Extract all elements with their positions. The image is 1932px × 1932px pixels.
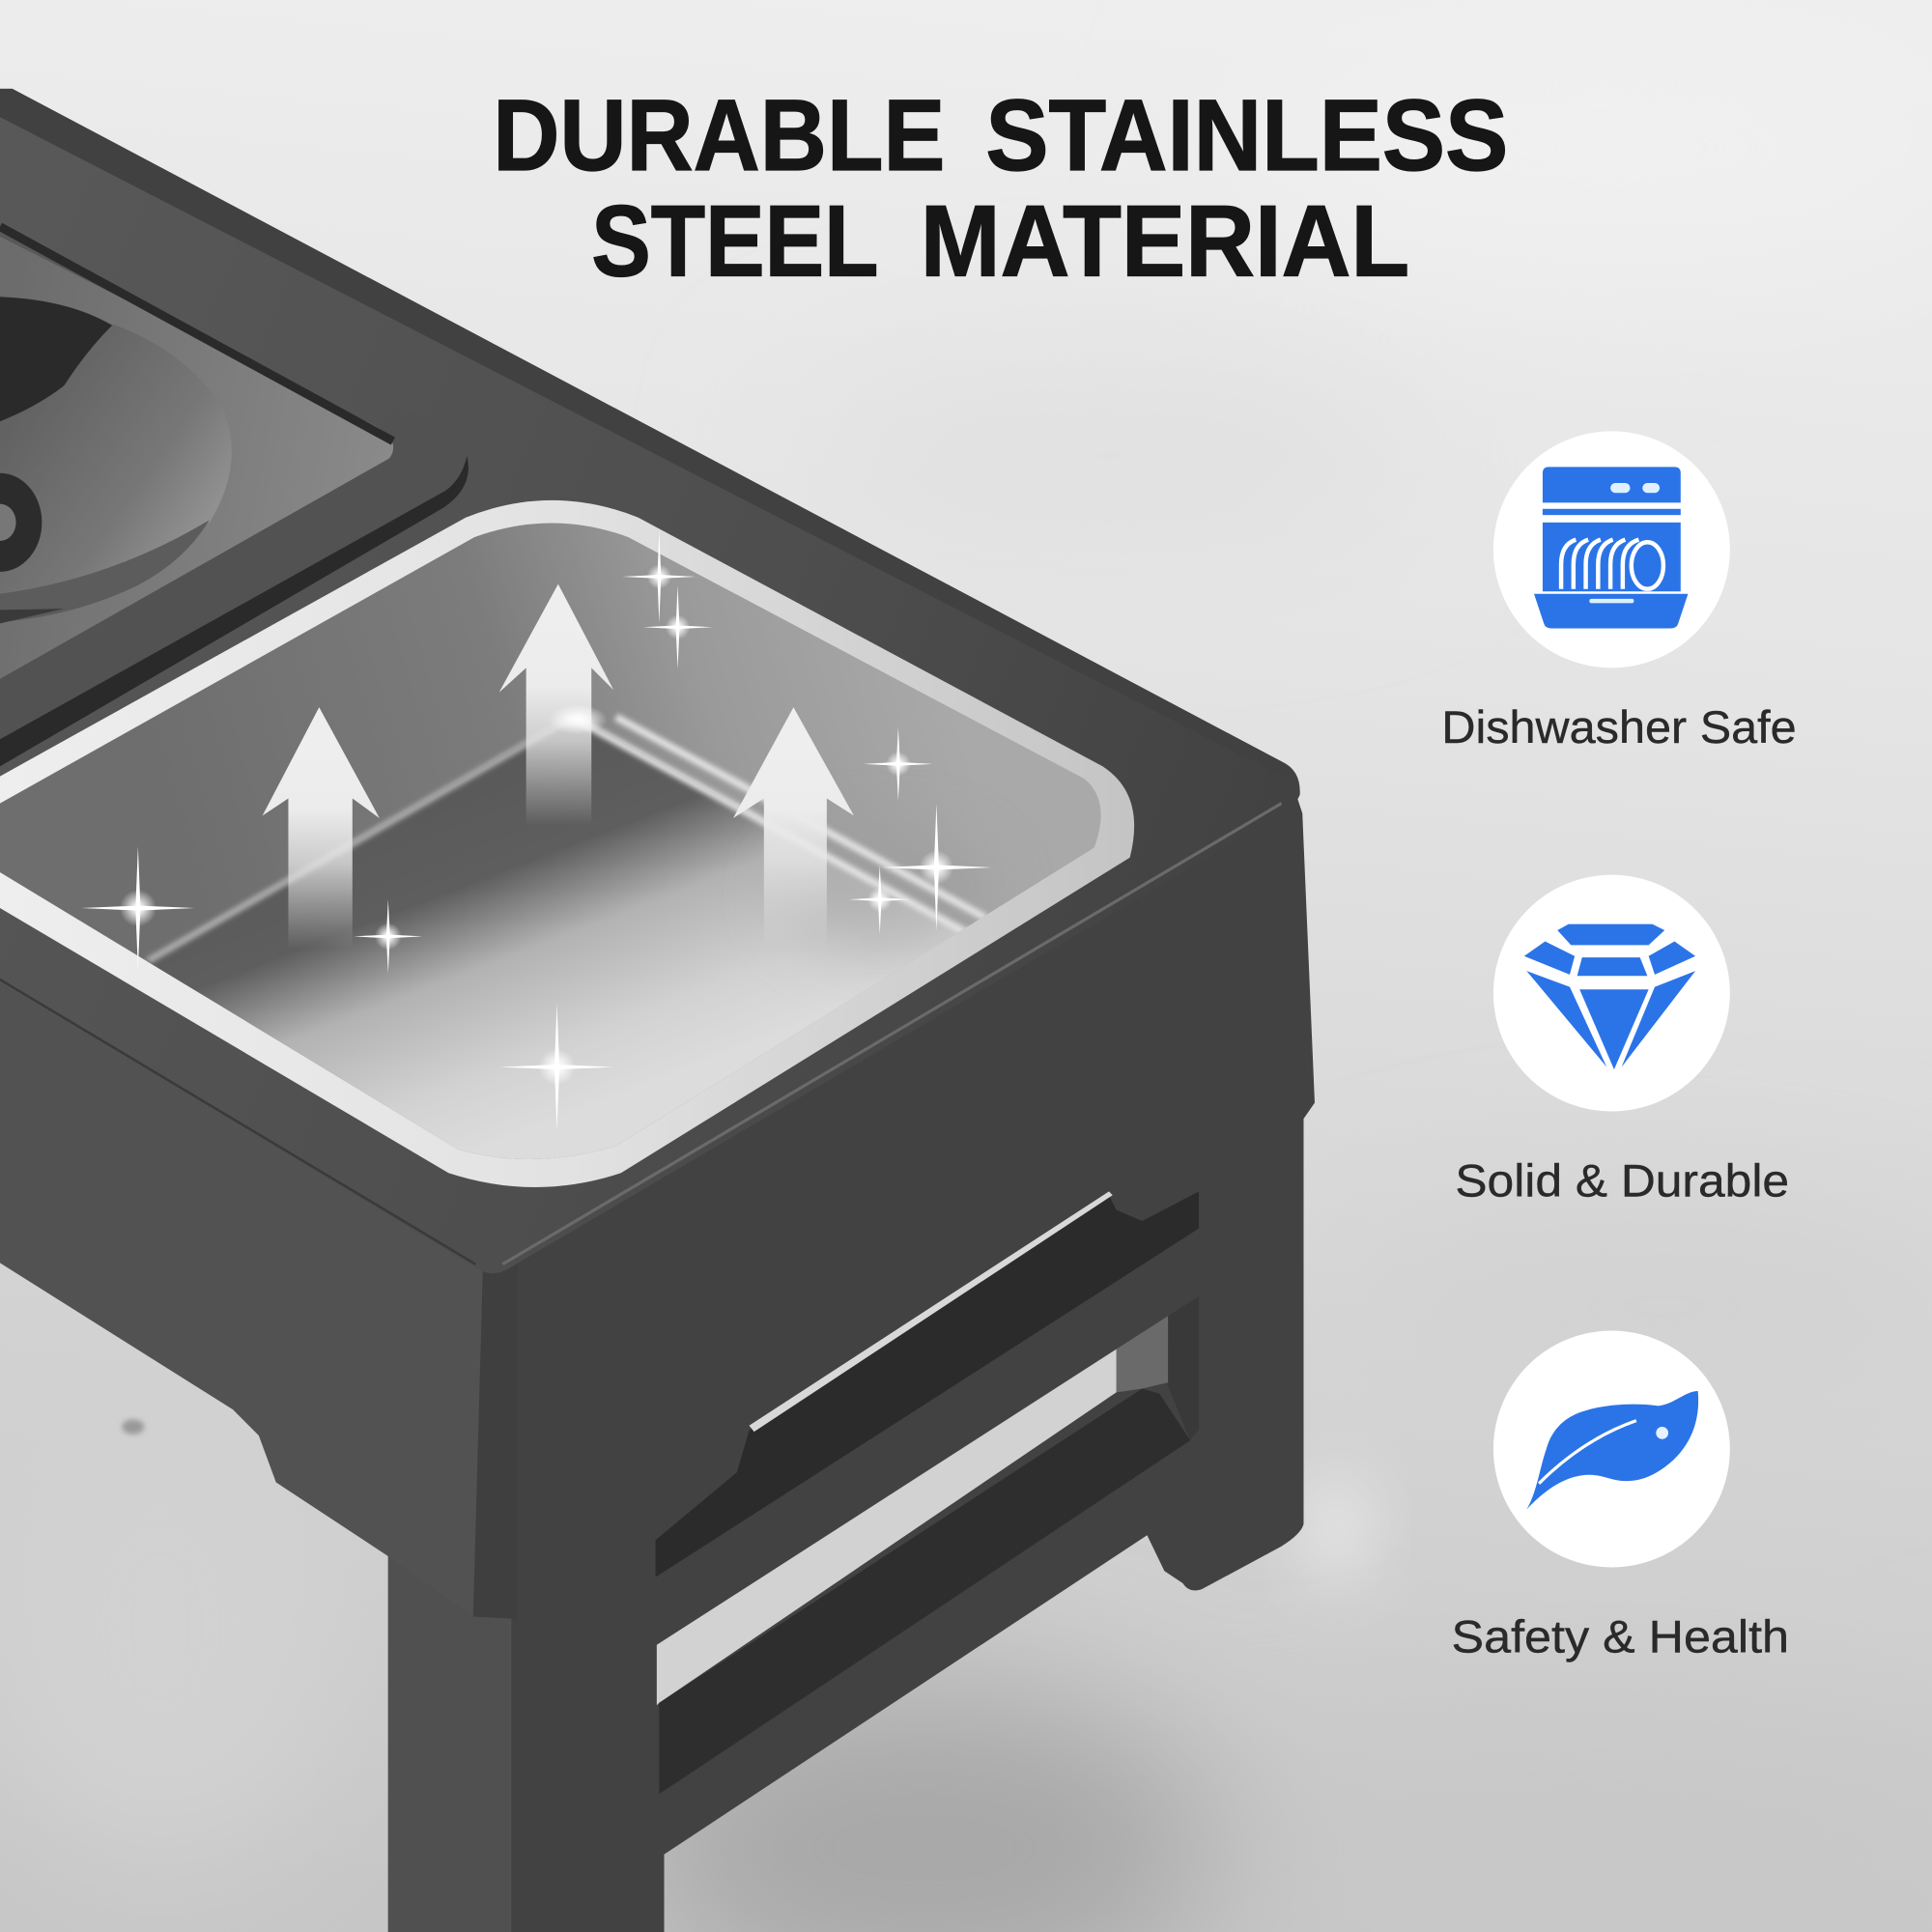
upper slot light sliver [750, 1191, 1113, 1432]
stand top surface [0, 89, 1300, 1273]
icon: diamond [1524, 924, 1695, 1069]
feature: solid and durable [1455, 875, 1789, 1208]
tray rim face [0, 407, 467, 739]
icon: arrow centre [499, 584, 613, 826]
front leg lighter side [388, 1556, 509, 1932]
feature: dishwasher safe [1441, 431, 1797, 753]
stand left face [0, 980, 518, 1932]
upper rung recess [656, 1191, 1199, 1577]
back leg inner dark column [1168, 1296, 1199, 1440]
stainless steel bowl [0, 493, 1134, 1187]
sparkles [81, 529, 992, 1131]
title [493, 79, 1508, 298]
floor gap between rungs [657, 1350, 1117, 1705]
label: Dishwasher Safe [1441, 702, 1797, 753]
icon: arrow left [263, 707, 380, 949]
top plate edge lines [0, 980, 475, 1264]
icon: leaf [1526, 1391, 1698, 1509]
title: DURABLE [493, 79, 945, 192]
label: Solid & Durable [1455, 1156, 1789, 1208]
product: elevated pet feeder stand [0, 89, 1315, 1932]
title: STEEL [591, 185, 878, 298]
back edge strip [0, 89, 1292, 781]
back leg inner grey face [1117, 1316, 1168, 1392]
tray lower shadow band [0, 456, 469, 766]
icon: arrow right [733, 707, 854, 949]
centre arrow glow [549, 705, 608, 734]
left tray with black bowl [0, 227, 469, 766]
tray groove [0, 227, 393, 441]
icon: dishwasher [1534, 467, 1688, 629]
title: STAINLESS [985, 79, 1508, 192]
label: Safety & Health [1452, 1611, 1789, 1662]
feature: safety and health [1452, 1331, 1789, 1662]
title: MATERIAL [921, 185, 1409, 298]
lower rung recess [659, 1389, 1190, 1794]
tray interior [0, 237, 393, 679]
stand right face [480, 795, 1315, 1932]
corner strip [473, 1263, 518, 1619]
